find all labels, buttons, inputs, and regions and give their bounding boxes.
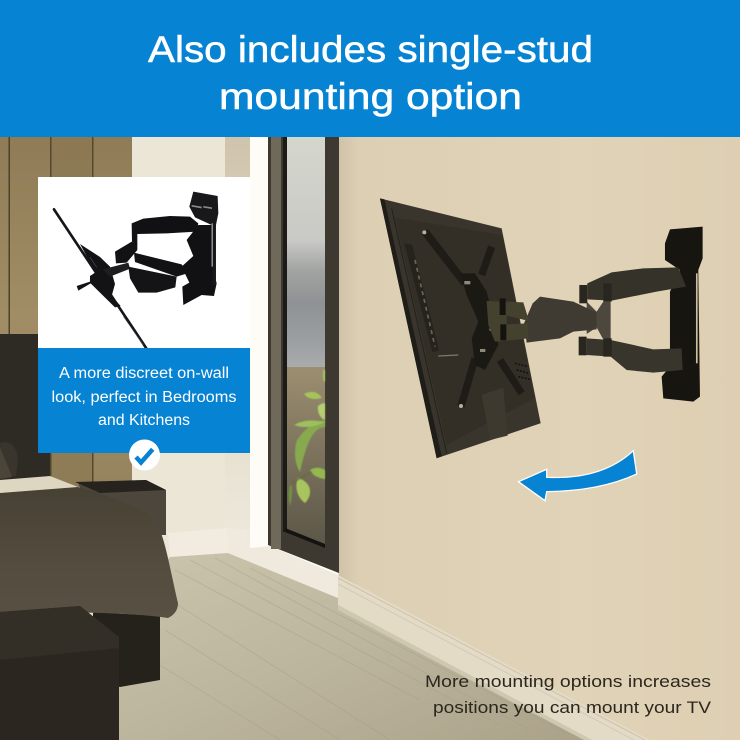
side wall section (225, 137, 250, 557)
floor (100, 553, 600, 740)
white sheet (0, 476, 78, 493)
elbow joint (587, 302, 611, 339)
arm fork (487, 298, 529, 342)
upper arm (587, 267, 686, 301)
TV back panel (380, 198, 541, 458)
VESA bracket (422, 230, 522, 408)
bottom caption: positions you can mount your TV (433, 698, 712, 717)
right wall (339, 137, 740, 740)
nightstand (75, 480, 166, 535)
headboard (0, 334, 50, 484)
elbow caps (579, 283, 612, 357)
callout panel: single-stud mount (38, 177, 250, 470)
text panel (38, 348, 250, 453)
storage bench (0, 606, 119, 740)
bottom caption (425, 672, 712, 717)
lower arm (587, 338, 683, 373)
ports strip (404, 243, 439, 352)
text panel: and Kitchens (98, 412, 190, 429)
wall mount plate and arms (524, 227, 703, 402)
bed base (93, 612, 160, 687)
wall plate (662, 227, 703, 402)
icon: product mount photo (54, 192, 218, 352)
plant leaves (289, 370, 325, 506)
right wall baseboard (338, 575, 650, 740)
lower cover panel (482, 388, 508, 440)
text panel: look, perfect in Bedrooms (52, 389, 237, 406)
main arm (524, 297, 597, 343)
title: Also includes single-stud (148, 29, 593, 70)
title: mounting option (219, 76, 522, 117)
window frame and glass (268, 137, 339, 573)
icon: curved swivel arrow (518, 451, 637, 501)
window sill (227, 528, 338, 598)
bedroom furniture (0, 334, 178, 740)
title (148, 29, 593, 117)
icon: check badge (129, 440, 160, 470)
wood panelled wall (0, 137, 132, 487)
back wall (130, 137, 230, 562)
vent marks (515, 363, 530, 379)
pillows (0, 442, 18, 479)
left wall baseboard (168, 528, 228, 557)
blanket (0, 487, 178, 618)
window reveal (250, 137, 338, 578)
title banner (0, 0, 740, 137)
bottom caption: More mounting options increases (425, 672, 711, 691)
text panel: A more discreet on-wall (59, 365, 229, 382)
